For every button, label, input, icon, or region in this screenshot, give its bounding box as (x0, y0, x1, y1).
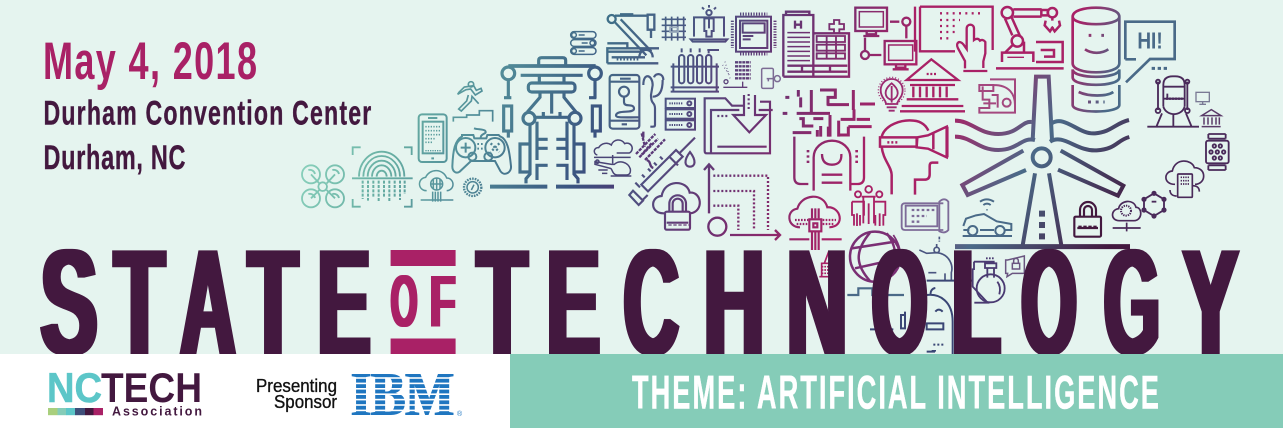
icon: robotic printer arm (607, 14, 659, 63)
icon: smart watch (1206, 134, 1229, 170)
icon: hospital (783, 12, 849, 77)
icon: phone key (762, 68, 780, 88)
icon: smiling database speaker (1073, 8, 1119, 111)
icon: storage pills (571, 32, 596, 54)
icon: microscope (979, 79, 1015, 113)
title: STATE OF TECHNOLOGY: O (1021, 219, 1077, 388)
icon: cloud phone (1166, 161, 1204, 197)
technology icon cluster: centre (607, 5, 948, 250)
title: STATE OF TECHNOLOGY: L (952, 217, 1001, 387)
NCTECH Association logo (47, 364, 202, 419)
icon: tablet scroll (902, 199, 948, 232)
white logo strip (0, 354, 510, 428)
icon: touch panel (915, 7, 993, 71)
icon: neural circuit (783, 90, 875, 137)
icon: game controller (452, 128, 511, 174)
icon: test tubes (671, 48, 719, 92)
icon: data tower (723, 62, 751, 87)
icon: circuit grid (662, 17, 686, 41)
icon: gear (464, 179, 481, 196)
title: STATE OF TECHNOLOGY: T (114, 218, 165, 387)
technology icons behind title (819, 232, 1024, 355)
title word: OF block (391, 250, 456, 354)
icon: chat lock (1006, 256, 1024, 277)
title word: OF block: F (430, 261, 456, 342)
title: STATE OF TECHNOLOGY: S (40, 219, 98, 388)
icon: helicopter and clouds (594, 140, 632, 176)
icon: syringe (629, 138, 695, 205)
title: STATE OF TECHNOLOGY: T (477, 218, 527, 387)
venue city: Durham, NC (44, 139, 185, 177)
icon: speech bubble: HI! (1137, 28, 1163, 54)
title: STATE OF TECHNOLOGY: O (872, 219, 927, 388)
icon: connected monitors (855, 8, 916, 69)
presenting sponsor label: Sponsor (274, 392, 337, 412)
NCTECH Association logo: TECH (101, 364, 202, 411)
icon: light bulb leaf (878, 77, 905, 111)
icon: chatbot (870, 281, 973, 355)
theme banner: THEME: ARTIFICIAL INTELLIGENCE (632, 367, 1159, 419)
icon: small monitor (1196, 92, 1209, 104)
title: STATE OF TECHNOLOGY: H (704, 217, 765, 386)
icon: routed arrows (704, 164, 780, 240)
title: STATE OF TECHNOLOGY: E (317, 218, 371, 387)
event date: May 4, 2018 (43, 31, 257, 91)
title: STATE OF TECHNOLOGY: A (180, 219, 235, 387)
technology icon cluster: right (900, 7, 1229, 247)
title: STATE OF TECHNOLOGY: T (248, 218, 298, 387)
icon: globe on stand (850, 232, 901, 283)
icon: wind turbine (955, 77, 1130, 247)
icon: small bank (1202, 110, 1221, 127)
NCTECH Association logo: Association (112, 405, 202, 419)
icon: server stack (666, 99, 695, 130)
icon: piggy bank (919, 237, 952, 280)
icon: connected car (963, 199, 1012, 236)
IBM logo: ® (457, 410, 463, 418)
technology icon cluster: left (302, 32, 632, 207)
icon: cloud lock (653, 183, 700, 230)
icon: cloud gear (1112, 201, 1141, 231)
icon: molecule hexagon (1142, 192, 1166, 218)
title: STATE OF TECHNOLOGY: E (547, 218, 600, 387)
icon: robot arm (996, 7, 1064, 68)
theme banner (510, 354, 1283, 428)
icon: exoskeleton robot (490, 58, 614, 187)
presenting sponsor label (256, 376, 337, 412)
icon: capsule rover (1147, 76, 1199, 127)
icon: globe cloud (419, 171, 453, 202)
title word: OF block: O (391, 261, 417, 343)
icon: runner and stairs (453, 82, 493, 122)
icon: microchip (732, 14, 775, 54)
icon: fingerprint touch (794, 137, 864, 191)
presenting sponsor label: Presenting (256, 376, 337, 396)
icon: robotic glove (636, 132, 665, 168)
title: STATE OF TECHNOLOGY: C (624, 219, 679, 387)
icon: laptop person (691, 5, 727, 42)
icon: city block (819, 253, 843, 277)
IBM logo: IBM (351, 361, 454, 428)
icon: folder download (705, 94, 773, 153)
icon: padlock (1074, 202, 1101, 237)
icon: platform (847, 288, 904, 295)
icon: vr headset (880, 120, 947, 195)
icon: cloud chip (789, 197, 842, 250)
title: STATE OF TECHNOLOGY (40, 217, 1239, 388)
title: STATE OF TECHNOLOGY: Y (1183, 218, 1239, 386)
icon: fingerprint (352, 147, 413, 207)
icon: speech bubble (1125, 22, 1175, 82)
venue name: Durham Convention Center (44, 95, 371, 132)
icon: flask (973, 258, 1005, 303)
icon: team of people (852, 186, 885, 226)
icon: bank building (900, 59, 965, 111)
icon: drone (302, 165, 344, 207)
icon: stethoscope phone (610, 74, 663, 129)
icon: tablet (419, 114, 447, 162)
NCTECH Association logo: NC (47, 364, 102, 411)
title: STATE OF TECHNOLOGY: N (787, 217, 848, 386)
title: STATE OF TECHNOLOGY: G (1104, 219, 1160, 388)
